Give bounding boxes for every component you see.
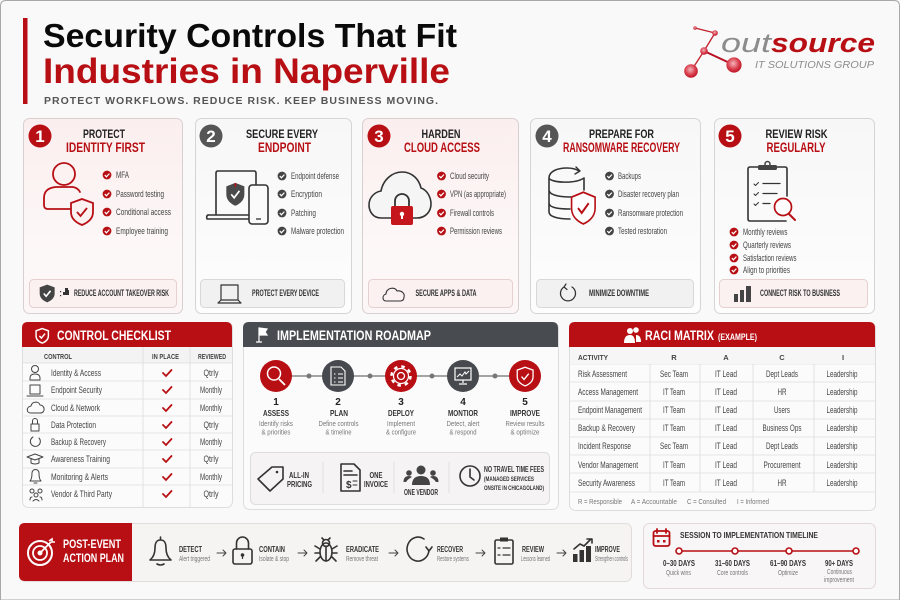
row: backup and recovery: Business Ops [762, 423, 802, 433]
milestone 31-60 days: Core controls [717, 570, 748, 577]
step: review [495, 538, 550, 564]
RACI legend: C = Consulted [687, 497, 726, 506]
timeline track [676, 548, 859, 554]
row: vendor and third party [30, 489, 219, 501]
heading: ENDPOINT [258, 140, 312, 155]
RACI header: RACI MATRIX [645, 328, 714, 343]
column headings: IN PLACE [152, 352, 179, 361]
step 1 assess [259, 360, 293, 436]
logo: outsource IT Solutions Group: IT SOLUTIONS GROUP [755, 59, 874, 71]
step: improve [573, 539, 628, 563]
action plan banner: ACTION PLAN [63, 551, 124, 565]
row: vendor management: IT Lead [715, 460, 737, 470]
step 3 deploy: 3 [398, 397, 404, 408]
checklist: Ransomware protection [618, 208, 683, 219]
panel: 1 protect identity first [24, 118, 182, 314]
heading: PREPARE FOR [589, 129, 655, 141]
panel: 5 review risk regularly [714, 118, 874, 314]
row: endpoint management: Users [774, 405, 790, 415]
RACI column headings [570, 347, 875, 364]
callout [30, 280, 176, 308]
arrow [476, 550, 485, 556]
arrow [389, 550, 398, 556]
step: recover: Restore systems [437, 556, 469, 563]
milestone 90+ days [824, 559, 854, 584]
arrow [217, 550, 226, 556]
checklist: MFA [116, 170, 129, 181]
icon: clipboard with magnifier [748, 162, 795, 221]
row: awareness training: Qtrly [204, 454, 219, 465]
column headings: CONTROL [44, 352, 72, 361]
all-in pricing [258, 467, 312, 491]
step 5 improve: & optimize [510, 428, 540, 436]
checklist: Cloud security [450, 171, 489, 182]
number badge 1: 1 [35, 127, 45, 146]
column headings [23, 347, 232, 363]
heading [404, 129, 480, 155]
title line 1: Security Controls That Fit [43, 18, 457, 55]
number badge 5 [718, 124, 742, 148]
checklist [103, 170, 171, 237]
step: improve: Strengthen controls [595, 556, 628, 563]
panel: 4 prepare for ransomware recovery [530, 118, 700, 314]
one invoice: $ [346, 480, 352, 491]
row: awareness training [27, 454, 219, 465]
row: endpoint management: Leadership [826, 405, 858, 415]
row: endpoint management: Endpoint Management [578, 405, 642, 415]
icon: database with shield [549, 167, 595, 224]
row: endpoint management: IT Team [663, 405, 685, 415]
all-in pricing: PRICING [287, 480, 312, 489]
checklist header: CONTROL CHECKLIST [57, 328, 172, 343]
row: monitoring and alerts: Monthly [200, 472, 222, 483]
step 4 monitor: 4 [460, 397, 466, 408]
number badge 4: 4 [542, 127, 552, 146]
icon: laptop and phone with shield [207, 171, 268, 224]
number badge 2: 2 [206, 127, 216, 146]
step: recover [407, 537, 469, 563]
heading [766, 129, 828, 155]
step 2 plan: 2 [335, 397, 341, 408]
row: incident response: Dept Leads [766, 441, 798, 451]
callout: MINIMIZE DOWNTIME [589, 288, 649, 299]
callout [368, 280, 512, 308]
checklist: Password testing [116, 189, 164, 200]
row: identity and access: Identity & Access [51, 368, 101, 379]
step 3 deploy: & configure [386, 428, 416, 436]
row: backup and recovery: Backup & Recovery [51, 437, 106, 448]
checklist [605, 171, 683, 237]
milestone 31-60 days: 31–60 DAYS [715, 559, 750, 568]
row: cloud and network [27, 402, 222, 414]
step 1 assess: Identify risks [259, 419, 293, 428]
row: access management: IT Team [663, 387, 685, 397]
row: access management [578, 387, 858, 397]
RACI header: (EXAMPLE) [718, 332, 757, 343]
heading [563, 129, 680, 155]
row: incident response: Leadership [826, 441, 858, 451]
accent bar [23, 18, 28, 104]
row: incident response [578, 441, 858, 451]
checklist: Patching [291, 208, 316, 219]
panel: 3 harden cloud access [362, 118, 518, 314]
roadmap header: IMPLEMENTATION ROADMAP [277, 328, 431, 343]
RACI column headings: C [779, 353, 785, 362]
row: incident response: Incident Response [578, 441, 631, 451]
heading: REVIEW RISK [766, 129, 828, 141]
heading: PROTECT [83, 129, 125, 141]
logo: outsource IT Solutions Group [684, 26, 875, 78]
panel: session to implementation timeline [644, 524, 876, 588]
callout: CONNECT RISK TO BUSINESS [760, 288, 840, 299]
milestone 31-60 days [715, 559, 750, 577]
number badge 3 [368, 124, 390, 148]
milestone 90+ days: 90+ DAYS [825, 559, 853, 568]
one invoice: ONE [370, 471, 383, 480]
row: endpoint management: IT Lead [715, 405, 737, 415]
row: vendor and third party: Qtrly [204, 489, 219, 500]
number badge 3: 3 [374, 127, 384, 146]
row: endpoint security: Monthly [200, 385, 222, 396]
logo: outsource IT Solutions Group: source [771, 28, 875, 58]
checklist [730, 227, 797, 276]
row: security awareness: IT Lead [715, 478, 737, 488]
one invoice [341, 464, 388, 491]
heading: CLOUD ACCESS [404, 140, 480, 155]
row: risk assessment: Leadership [826, 369, 858, 379]
panel: RACI matrix [569, 322, 876, 510]
milestone 90+ days: Continuous [827, 569, 852, 576]
row: access management: Leadership [826, 387, 858, 397]
row: endpoint security: Endpoint Security [51, 385, 102, 396]
RACI legend: A = Accountable [631, 497, 677, 506]
row: identity and access [30, 366, 219, 380]
heading: RANSOMWARE RECOVERY [563, 140, 680, 155]
step: improve: IMPROVE [595, 545, 620, 554]
arrow [557, 550, 566, 556]
checklist: Firewall controls [450, 208, 494, 219]
callout [200, 280, 344, 308]
row: endpoint management [578, 405, 858, 415]
checklist: Tested restoration [618, 226, 667, 237]
row: cloud and network: Monthly [200, 403, 222, 414]
row: risk assessment [578, 369, 858, 379]
step 4 monitor: Detect, alert [446, 419, 480, 428]
row: backup and recovery: Monthly [200, 437, 222, 448]
heading: REGULARLY [766, 140, 826, 155]
subtitle: PROTECT WORKFLOWS. REDUCE RISK. KEEP BUSINESS MOVING. [44, 95, 438, 107]
row: risk assessment: Sec Team [660, 369, 688, 379]
row: backup and recovery: Leadership [826, 423, 858, 433]
row: risk assessment: Risk Assessment [578, 369, 627, 379]
row: backup and recovery [578, 423, 858, 433]
step 3 deploy [385, 360, 417, 436]
step 4 monitor: MONTIOR [448, 408, 478, 418]
callout: SECURE APPS & DATA [416, 288, 477, 299]
row: incident response: Sec Team [660, 441, 688, 451]
row: backup and recovery: IT Team [663, 423, 685, 433]
row: risk assessment: IT Lead [715, 369, 737, 379]
step 1 assess: & priorities [262, 428, 291, 436]
checklist: Malware protection [291, 226, 344, 237]
no travel time fees: ONSITE IN CHICAGOLAND) [484, 485, 544, 492]
step: contain: Isolate & stop [259, 556, 289, 563]
step 4 monitor [446, 360, 480, 436]
step: detect [150, 537, 210, 565]
row: access management: IT Lead [715, 387, 737, 397]
step 5 improve: Review results [506, 419, 545, 428]
row: data protection: Qtrly [204, 420, 219, 431]
row: vendor management: Vendor Management [578, 460, 638, 470]
logo: outsource IT Solutions Group: out [721, 28, 773, 58]
checklist: Quarterly reviews [743, 240, 791, 251]
checklist header [22, 322, 232, 347]
row: awareness training: Awareness Training [51, 454, 110, 465]
step 2 plan: & timeline [326, 428, 352, 436]
callout [536, 280, 694, 308]
row: incident response: IT Lead [715, 441, 737, 451]
row: vendor management: Leadership [826, 460, 858, 470]
milestone 0-30 days: 0–30 DAYS [663, 559, 696, 568]
RACI legend [578, 497, 769, 506]
callout: REDUCE ACCOUNT TAKEOVER RISK [74, 288, 169, 299]
milestone 0-30 days: Quick wins [666, 570, 691, 577]
one vendor: ONE VENDOR [404, 488, 438, 497]
benefits box [250, 452, 550, 504]
row: identity and access: Qtrly [204, 368, 219, 379]
heading [66, 129, 146, 155]
checklist: VPN (as appropriate) [450, 189, 506, 200]
one vendor [404, 466, 438, 497]
milestone 90+ days: improvement [824, 577, 854, 584]
step 2 plan [318, 360, 359, 436]
step: recover: RECOVER [437, 545, 463, 554]
column headings: REVIEWED [198, 352, 226, 361]
checklist: Align to priorities [743, 265, 790, 276]
RACI column headings: R [671, 353, 677, 362]
title line 2: Industries in Naperville [43, 51, 450, 91]
action plan banner [19, 523, 132, 581]
step: eradicate: ERADICATE [346, 545, 379, 554]
title block [23, 18, 457, 107]
row: backup and recovery: Backup & Recovery [578, 423, 635, 433]
step 2 plan: Define controls [318, 419, 359, 428]
step: contain [233, 537, 289, 564]
roadmap connector [276, 374, 525, 378]
step 1 assess: ASSESS [263, 408, 289, 418]
checklist [278, 171, 344, 237]
step 1 assess: 1 [273, 397, 279, 408]
checklist: Conditional access [116, 207, 171, 218]
step: contain: CONTAIN [259, 545, 285, 554]
RACI column headings: A [723, 353, 729, 362]
checklist [437, 171, 506, 237]
row: access management: Access Management [578, 387, 638, 397]
checklist: Satisfaction reviews [743, 253, 797, 264]
checklist: Endpoint defense [291, 171, 339, 182]
callout: PROTECT EVERY DEVICE [252, 288, 319, 299]
icon: user with shield [44, 163, 93, 225]
action plan banner: POST-EVENT [63, 537, 122, 551]
callout [720, 280, 868, 308]
step 5 improve: IMPROVE [510, 408, 540, 418]
heading: IDENTITY FIRST [66, 140, 146, 155]
RACI header [569, 322, 875, 347]
heading: SECURE EVERY [246, 129, 318, 141]
RACI legend: I = Informed [737, 497, 769, 506]
step: eradicate [315, 538, 379, 563]
RACI column headings: I [842, 353, 844, 362]
RACI legend: R = Responsible [578, 497, 622, 506]
row: security awareness: HR [778, 478, 787, 488]
row: monitoring and alerts [30, 470, 222, 483]
row: data protection: Data Protection [51, 420, 96, 431]
step 2 plan: PLAN [330, 408, 348, 418]
row: vendor management [578, 460, 858, 470]
row: vendor management: IT Team [663, 460, 685, 470]
number badge 4 [536, 124, 558, 148]
step 3 deploy: DEPLOY [388, 408, 414, 418]
number badge 1 [28, 124, 52, 148]
milestone 61-90 days: Optimize [778, 570, 798, 577]
checklist: Monthly reviews [743, 227, 788, 238]
no travel time fees: (MANAGED SERVICES [484, 476, 534, 483]
roadmap header [243, 322, 558, 347]
row: endpoint security [27, 385, 222, 396]
timeline title: SESSION TO IMPLEMENTATION TIMELINE [680, 530, 818, 540]
row: backup and recovery [30, 437, 222, 448]
step: detect: DETECT [179, 545, 202, 554]
milestone 61-90 days [770, 559, 807, 577]
row: monitoring and alerts: Monitoring & Alerts [51, 472, 108, 483]
row: backup and recovery: IT Lead [715, 423, 737, 433]
step 5 improve [506, 360, 545, 436]
row: security awareness: IT Team [663, 478, 685, 488]
panel: implementation roadmap [243, 322, 558, 510]
panel: 2 secure every endpoint [196, 118, 352, 314]
number badge 2 [200, 124, 222, 148]
row: risk assessment: Dept Leads [766, 369, 798, 379]
heading [246, 129, 318, 155]
checklist: Permission reviews [450, 226, 502, 237]
one invoice: INVOICE [364, 480, 388, 489]
panel: post-event action plan [19, 523, 632, 582]
no travel time fees [460, 465, 544, 492]
row: security awareness: Security Awareness [578, 478, 635, 488]
milestone 61-90 days: 61–90 DAYS [770, 559, 807, 568]
checklist: Disaster recovery plan [618, 189, 679, 200]
row: data protection [31, 419, 219, 431]
checklist: Backups [618, 171, 641, 182]
no travel time fees: NO TRAVEL TIME FEES [484, 465, 544, 474]
step 4 monitor: & respond [450, 428, 476, 436]
row: security awareness: Leadership [826, 478, 858, 488]
step 3 deploy: Implement [387, 419, 416, 428]
icon: cloud with lock [369, 172, 431, 225]
icon: calendar [654, 529, 670, 546]
row: vendor management: Procurement [764, 460, 801, 470]
RACI column headings: ACTIVITY [578, 353, 608, 362]
checklist: Encryption [291, 189, 322, 200]
row: vendor and third party: Vendor & Third Party [51, 489, 112, 500]
step: eradicate: Remove threat [346, 556, 378, 563]
row: security awareness [578, 478, 858, 488]
panel: control checklist [22, 322, 232, 508]
step: review: Lessons learned [521, 556, 550, 563]
checklist: Employee training [116, 226, 168, 237]
milestone 0-30 days [663, 559, 696, 577]
row: cloud and network: Cloud & Network [51, 403, 100, 414]
number badge 5: 5 [725, 127, 735, 146]
step 5 improve: 5 [522, 397, 528, 408]
all-in pricing: ALL-IN [289, 471, 309, 480]
arrow [298, 550, 307, 556]
step: detect: Alert triggered [179, 556, 210, 563]
heading: HARDEN [422, 129, 460, 141]
step: review: REVIEW [522, 545, 544, 554]
row: access management: HR [778, 387, 787, 397]
